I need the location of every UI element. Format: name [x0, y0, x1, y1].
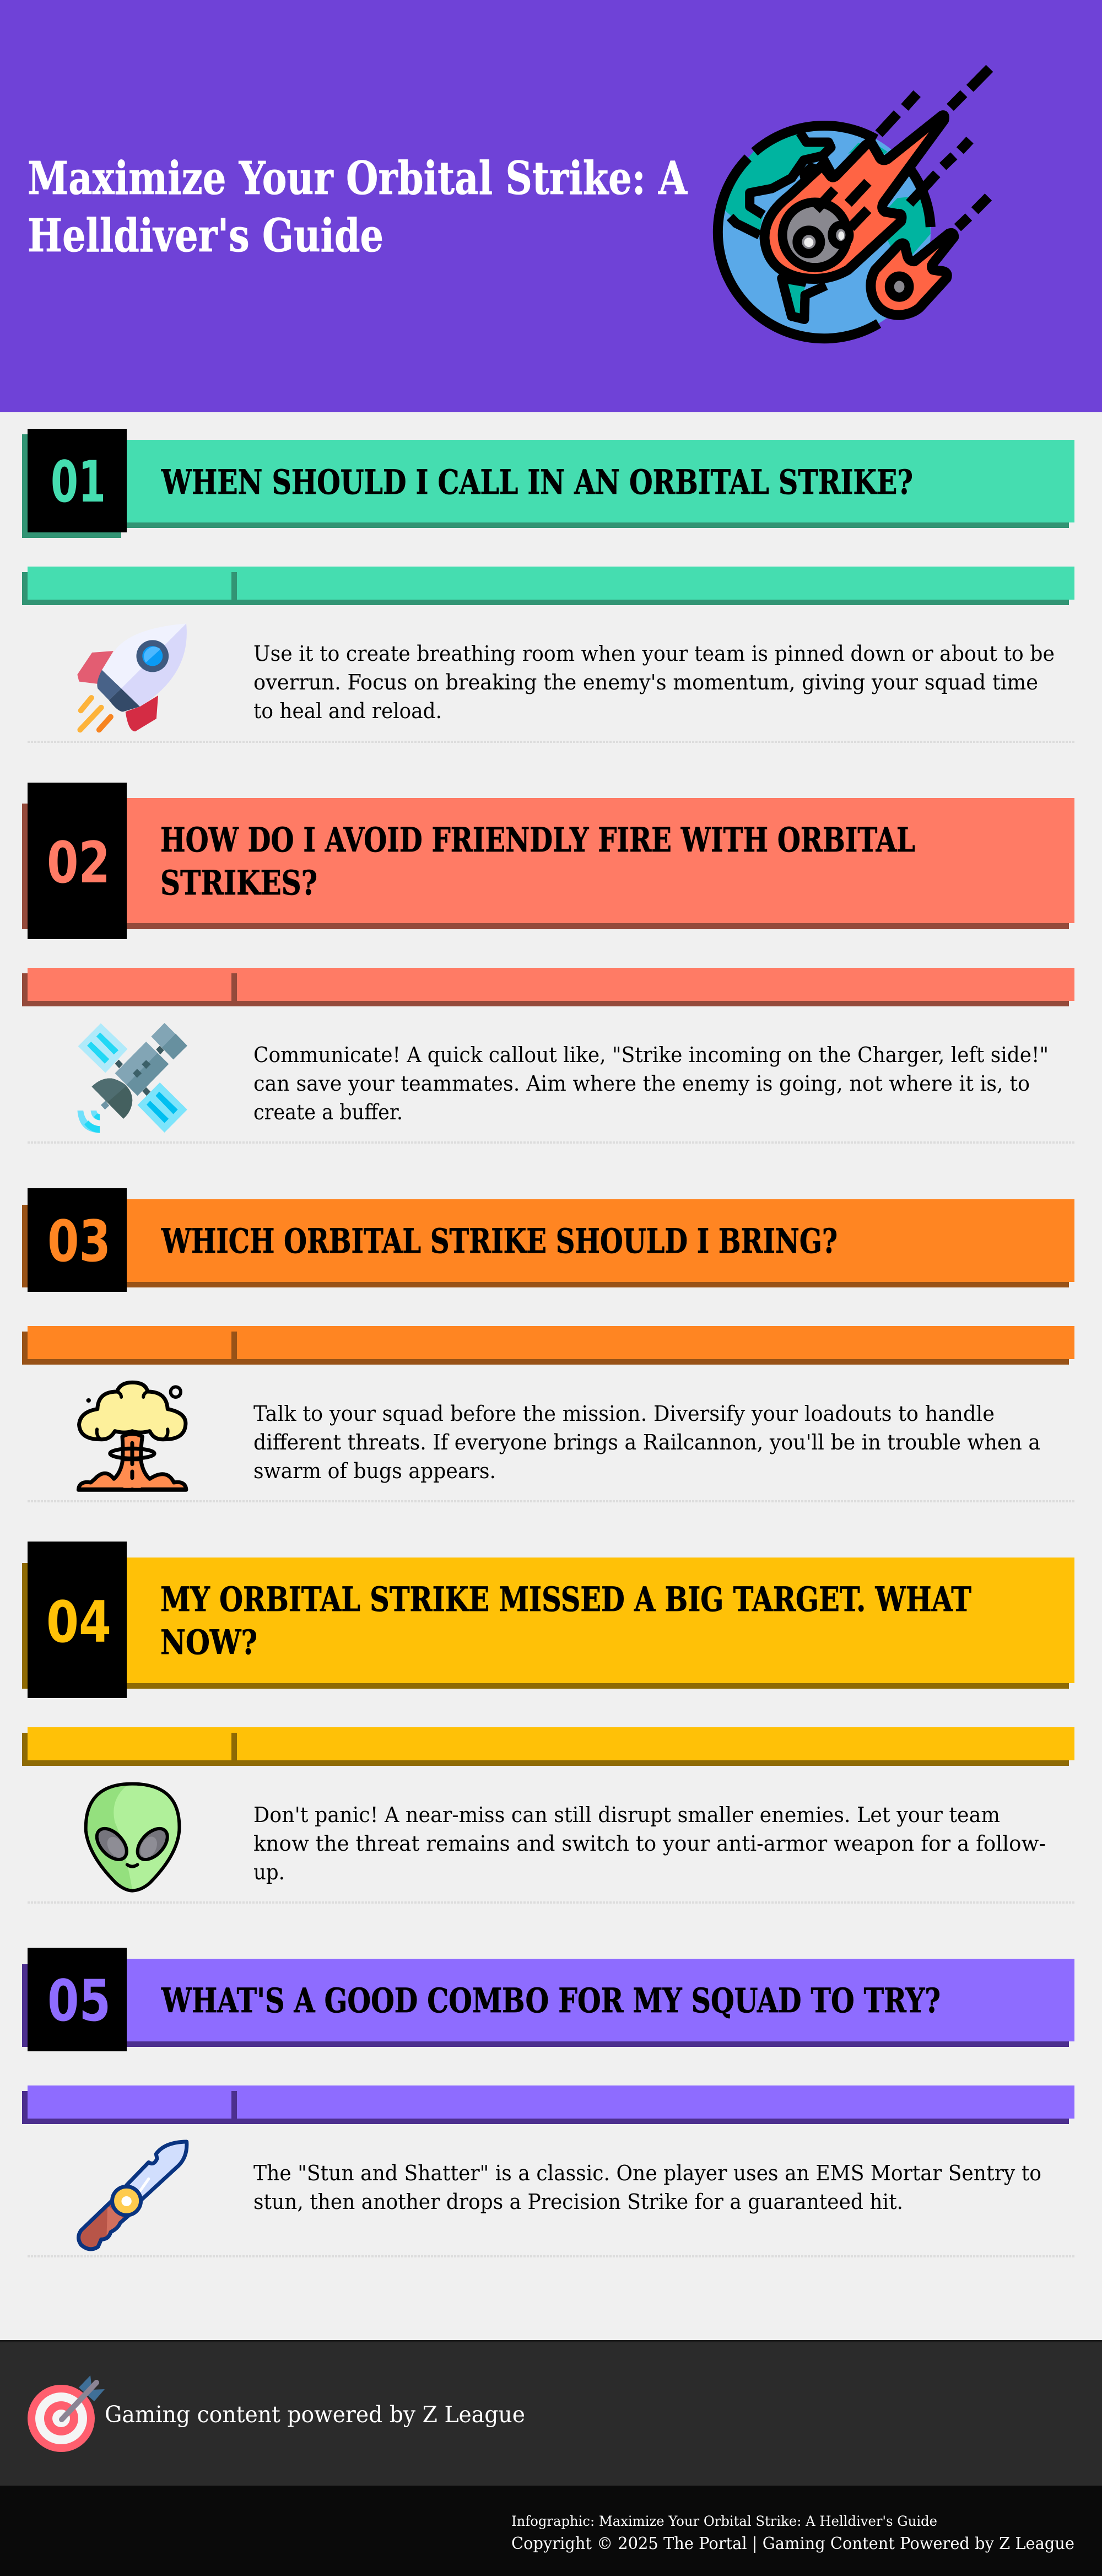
answer text 3: Talk to your squad before the mission. Diversify your loadouts to handle: [253, 1402, 995, 1426]
copyright band: [0, 2486, 1102, 2576]
column bar 1: [22, 567, 1074, 605]
answer text 3: different threats. If everyone brings a Railcannon, you'll be in trouble when a: [253, 1430, 1040, 1454]
brand text: Gaming content powered by Z League: [105, 2401, 525, 2428]
small comet: [871, 233, 954, 315]
answer text 3: swarm of bugs appears.: [253, 1459, 496, 1483]
answer text 4: up.: [253, 1860, 285, 1884]
question banner 3: 03: [47, 1209, 111, 1275]
answer text 1: overrun. Focus on breaking the enemy's momentum, giving your squad time: [253, 670, 1038, 694]
answer text 1: Use it to create breathing room when your team is pinned down or about to be: [253, 642, 1055, 666]
icon: satellite: [77, 1023, 187, 1133]
answer text 2: create a buffer.: [253, 1100, 403, 1124]
question banner 1: WHEN SHOULD I CALL IN AN ORBITAL STRIKE?: [161, 463, 913, 502]
question banner 4: NOW?: [160, 1623, 257, 1662]
question banner 1: 01: [51, 449, 106, 515]
title: Helldiver's Guide: [28, 209, 383, 262]
question banner 3: WHICH ORBITAL STRIKE SHOULD I BRING?: [161, 1222, 838, 1261]
main comet: [764, 115, 944, 279]
answer text 1: [253, 642, 1055, 723]
icon: mushroom cloud: [78, 1382, 186, 1491]
answer text 1: to heal and reload.: [253, 699, 442, 723]
question banner 1: [22, 429, 1074, 538]
answer text 5: [253, 2161, 1041, 2214]
question banner 4: 04: [46, 1589, 111, 1656]
icon: meteors striking the globe: [718, 68, 990, 338]
title: Maximize Your Orbital Strike: A: [28, 152, 688, 205]
column bar 4: [22, 1727, 1074, 1766]
question banner 2: 02: [47, 830, 110, 896]
title: [28, 152, 688, 262]
icon: folding knife: [79, 2142, 187, 2249]
question banner 2: [22, 783, 1074, 939]
header panel: [0, 0, 1102, 412]
section 2: [22, 783, 1074, 1143]
column bar 3: [22, 1326, 1074, 1365]
answer text 5: stun, then another drops a Precision Strike for a guaranteed hit.: [253, 2190, 903, 2214]
section 5: [22, 1948, 1074, 2256]
footer brand band: [0, 2340, 1102, 2486]
answer text 4: Don't panic! A near-miss can still disrupt smaller enemies. Let your team: [253, 1803, 1000, 1827]
comet rock: [782, 202, 847, 268]
streak dashes: [816, 68, 990, 228]
column bar 5: [22, 2085, 1074, 2124]
answer text 2: can save your teammates. Aim where the enemy is going, not where it is, to: [253, 1071, 1030, 1096]
answer text 3: [253, 1402, 1040, 1483]
question banner 2: HOW DO I AVOID FRIENDLY FIRE WITH ORBITAL: [160, 821, 915, 860]
answer text 5: The "Stun and Shatter" is a classic. One player uses an EMS Mortar Sentry to: [253, 2161, 1041, 2185]
question banner 3: [22, 1188, 1074, 1292]
question banner 5: 05: [47, 1968, 111, 2034]
answer text 2: Communicate! A quick callout like, "Strike incoming on the Charger, left side!": [253, 1043, 1049, 1067]
answer text 4: know the threat remains and switch to your anti-armor weapon for a follow-: [253, 1831, 1046, 1856]
section 1: [22, 429, 1074, 742]
question banner 4: [22, 1542, 1074, 1698]
column bar 2: [22, 968, 1074, 1006]
question banner 5: [22, 1948, 1074, 2051]
icon: target with arrow: [28, 2375, 105, 2452]
answer text 4: [253, 1803, 1046, 1884]
icon: alien head: [86, 1784, 179, 1891]
answer text 2: [253, 1043, 1049, 1124]
question banner 2: STRIKES?: [160, 864, 317, 903]
section 4: [22, 1542, 1074, 1903]
section 3: [22, 1188, 1074, 1501]
infographic credit: Infographic: Maximize Your Orbital Strike: A Helldiver's Guide: [511, 2513, 937, 2529]
icon: rocket: [77, 623, 187, 731]
copyright line: Copyright © 2025 The Portal | Gaming Content Powered by Z League: [511, 2534, 1074, 2553]
